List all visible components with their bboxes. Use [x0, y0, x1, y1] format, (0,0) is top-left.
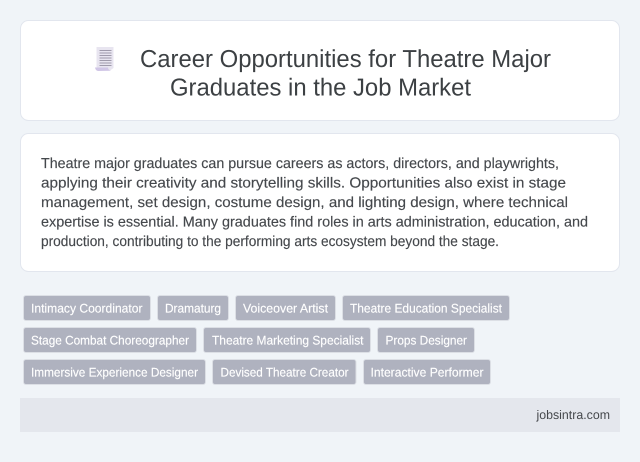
tag: Voiceover Artist	[236, 296, 336, 320]
tag: Devised Theatre Creator: Devised Theatre Creator	[220, 366, 348, 380]
tag: Theatre Education Specialist	[342, 296, 510, 320]
icon: paper scroll	[95, 47, 114, 71]
tag: Interactive Performer: Interactive Performer	[370, 366, 484, 380]
tag: Dramaturg: Dramaturg	[165, 302, 221, 316]
tag: Props Designer	[378, 328, 474, 352]
tag group: job titles	[24, 296, 510, 384]
title: Career Opportunities for Theatre Major	[140, 46, 551, 73]
tag: Theatre Marketing Specialist	[204, 328, 370, 352]
footer bar	[20, 398, 620, 432]
tag: Voiceover Artist: Voiceover Artist	[243, 302, 329, 316]
text block: description: expertise is essential. Many graduates find roles in arts administration, education, and	[41, 214, 588, 230]
tag: Theatre Marketing Specialist: Theatre Marketing Specialist	[212, 334, 364, 348]
text block: description: Theatre major graduates can pursue careers as actors, directors, and playwrights,	[41, 156, 559, 172]
panel: header	[20, 20, 620, 120]
tag: Devised Theatre Creator	[212, 360, 356, 384]
panel: description	[20, 134, 620, 272]
tag: Interactive Performer	[364, 360, 490, 384]
tag: Immersive Experience Designer	[24, 360, 206, 384]
tag: Dramaturg	[158, 296, 228, 320]
text block: description	[41, 156, 588, 250]
tag: Props Designer: Props Designer	[386, 334, 467, 348]
tag: Intimacy Coordinator	[24, 296, 150, 320]
footer source text: jobsintra.com	[536, 408, 610, 422]
tag: Stage Combat Choreographer: Stage Combat Choreographer	[31, 334, 189, 348]
text block: description: applying their creativity and storytelling skills. Opportunities also exist in stage	[41, 176, 566, 192]
tag: Theatre Education Specialist: Theatre Education Specialist	[350, 302, 502, 316]
tag: Intimacy Coordinator: Intimacy Coordinator	[31, 302, 142, 316]
tag: Immersive Experience Designer: Immersive Experience Designer	[31, 366, 198, 380]
tag: Stage Combat Choreographer	[24, 328, 196, 352]
title: Graduates in the Job Market	[170, 74, 471, 102]
title	[140, 46, 551, 102]
text block: description: management, set design, costume design, and lighting design, where technical	[41, 195, 568, 211]
text block: description: production, contributing to the performing arts ecosystem beyond the stage.	[41, 234, 499, 250]
